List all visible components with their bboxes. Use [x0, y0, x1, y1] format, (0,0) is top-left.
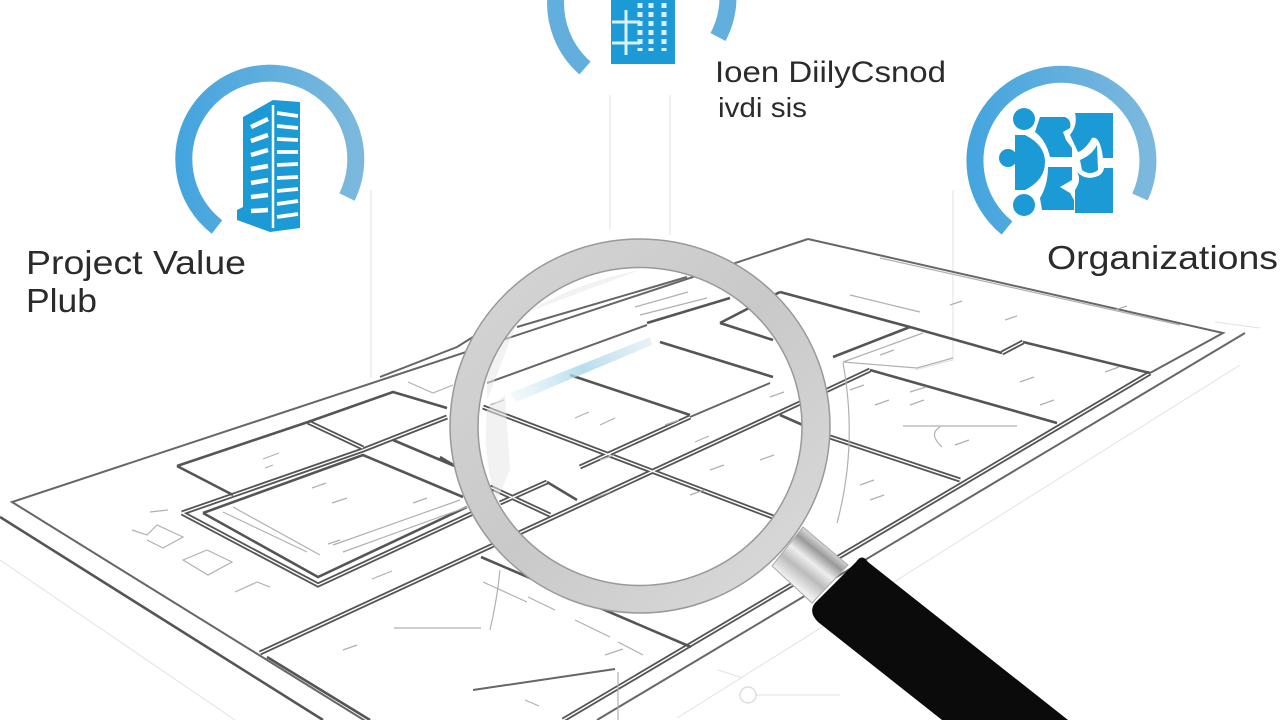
magnifying glass — [450, 239, 1068, 720]
lens reflection patches — [486, 270, 640, 500]
icon: office tower — [237, 100, 300, 232]
top label: ivdi sis — [718, 92, 807, 123]
single walls — [177, 292, 1150, 720]
lens frame — [450, 239, 830, 613]
top label: Ioen DiilyCsnod — [715, 56, 946, 89]
small plan symbols — [132, 510, 270, 592]
plan notes — [263, 301, 1127, 706]
label: project value — [26, 244, 246, 319]
icon block: project value — [184, 73, 356, 232]
label: project value: Plub — [26, 282, 97, 319]
label: project value: Project Value — [26, 244, 246, 281]
label: organizations: Organizations — [1047, 239, 1278, 276]
top label — [715, 56, 946, 123]
top arc — [556, 0, 728, 68]
outer sheet edge — [0, 517, 323, 720]
icon block: organizations — [975, 74, 1148, 228]
icon: puzzle — [999, 108, 1113, 216]
icon: city block — [611, 0, 675, 64]
double walls — [182, 342, 1150, 720]
right arc — [975, 74, 1148, 228]
icon block: top — [556, 0, 728, 68]
thin interior lines — [380, 277, 770, 690]
handle — [812, 558, 1068, 720]
sheet border — [12, 239, 1223, 720]
lens glare — [510, 337, 652, 402]
left arc — [184, 73, 356, 227]
blueprint floor plan — [0, 239, 1260, 720]
ferrule — [772, 527, 848, 603]
hexagon marker — [740, 687, 756, 703]
leader lines — [371, 95, 953, 378]
faint drawing sheet guides — [0, 322, 1260, 720]
